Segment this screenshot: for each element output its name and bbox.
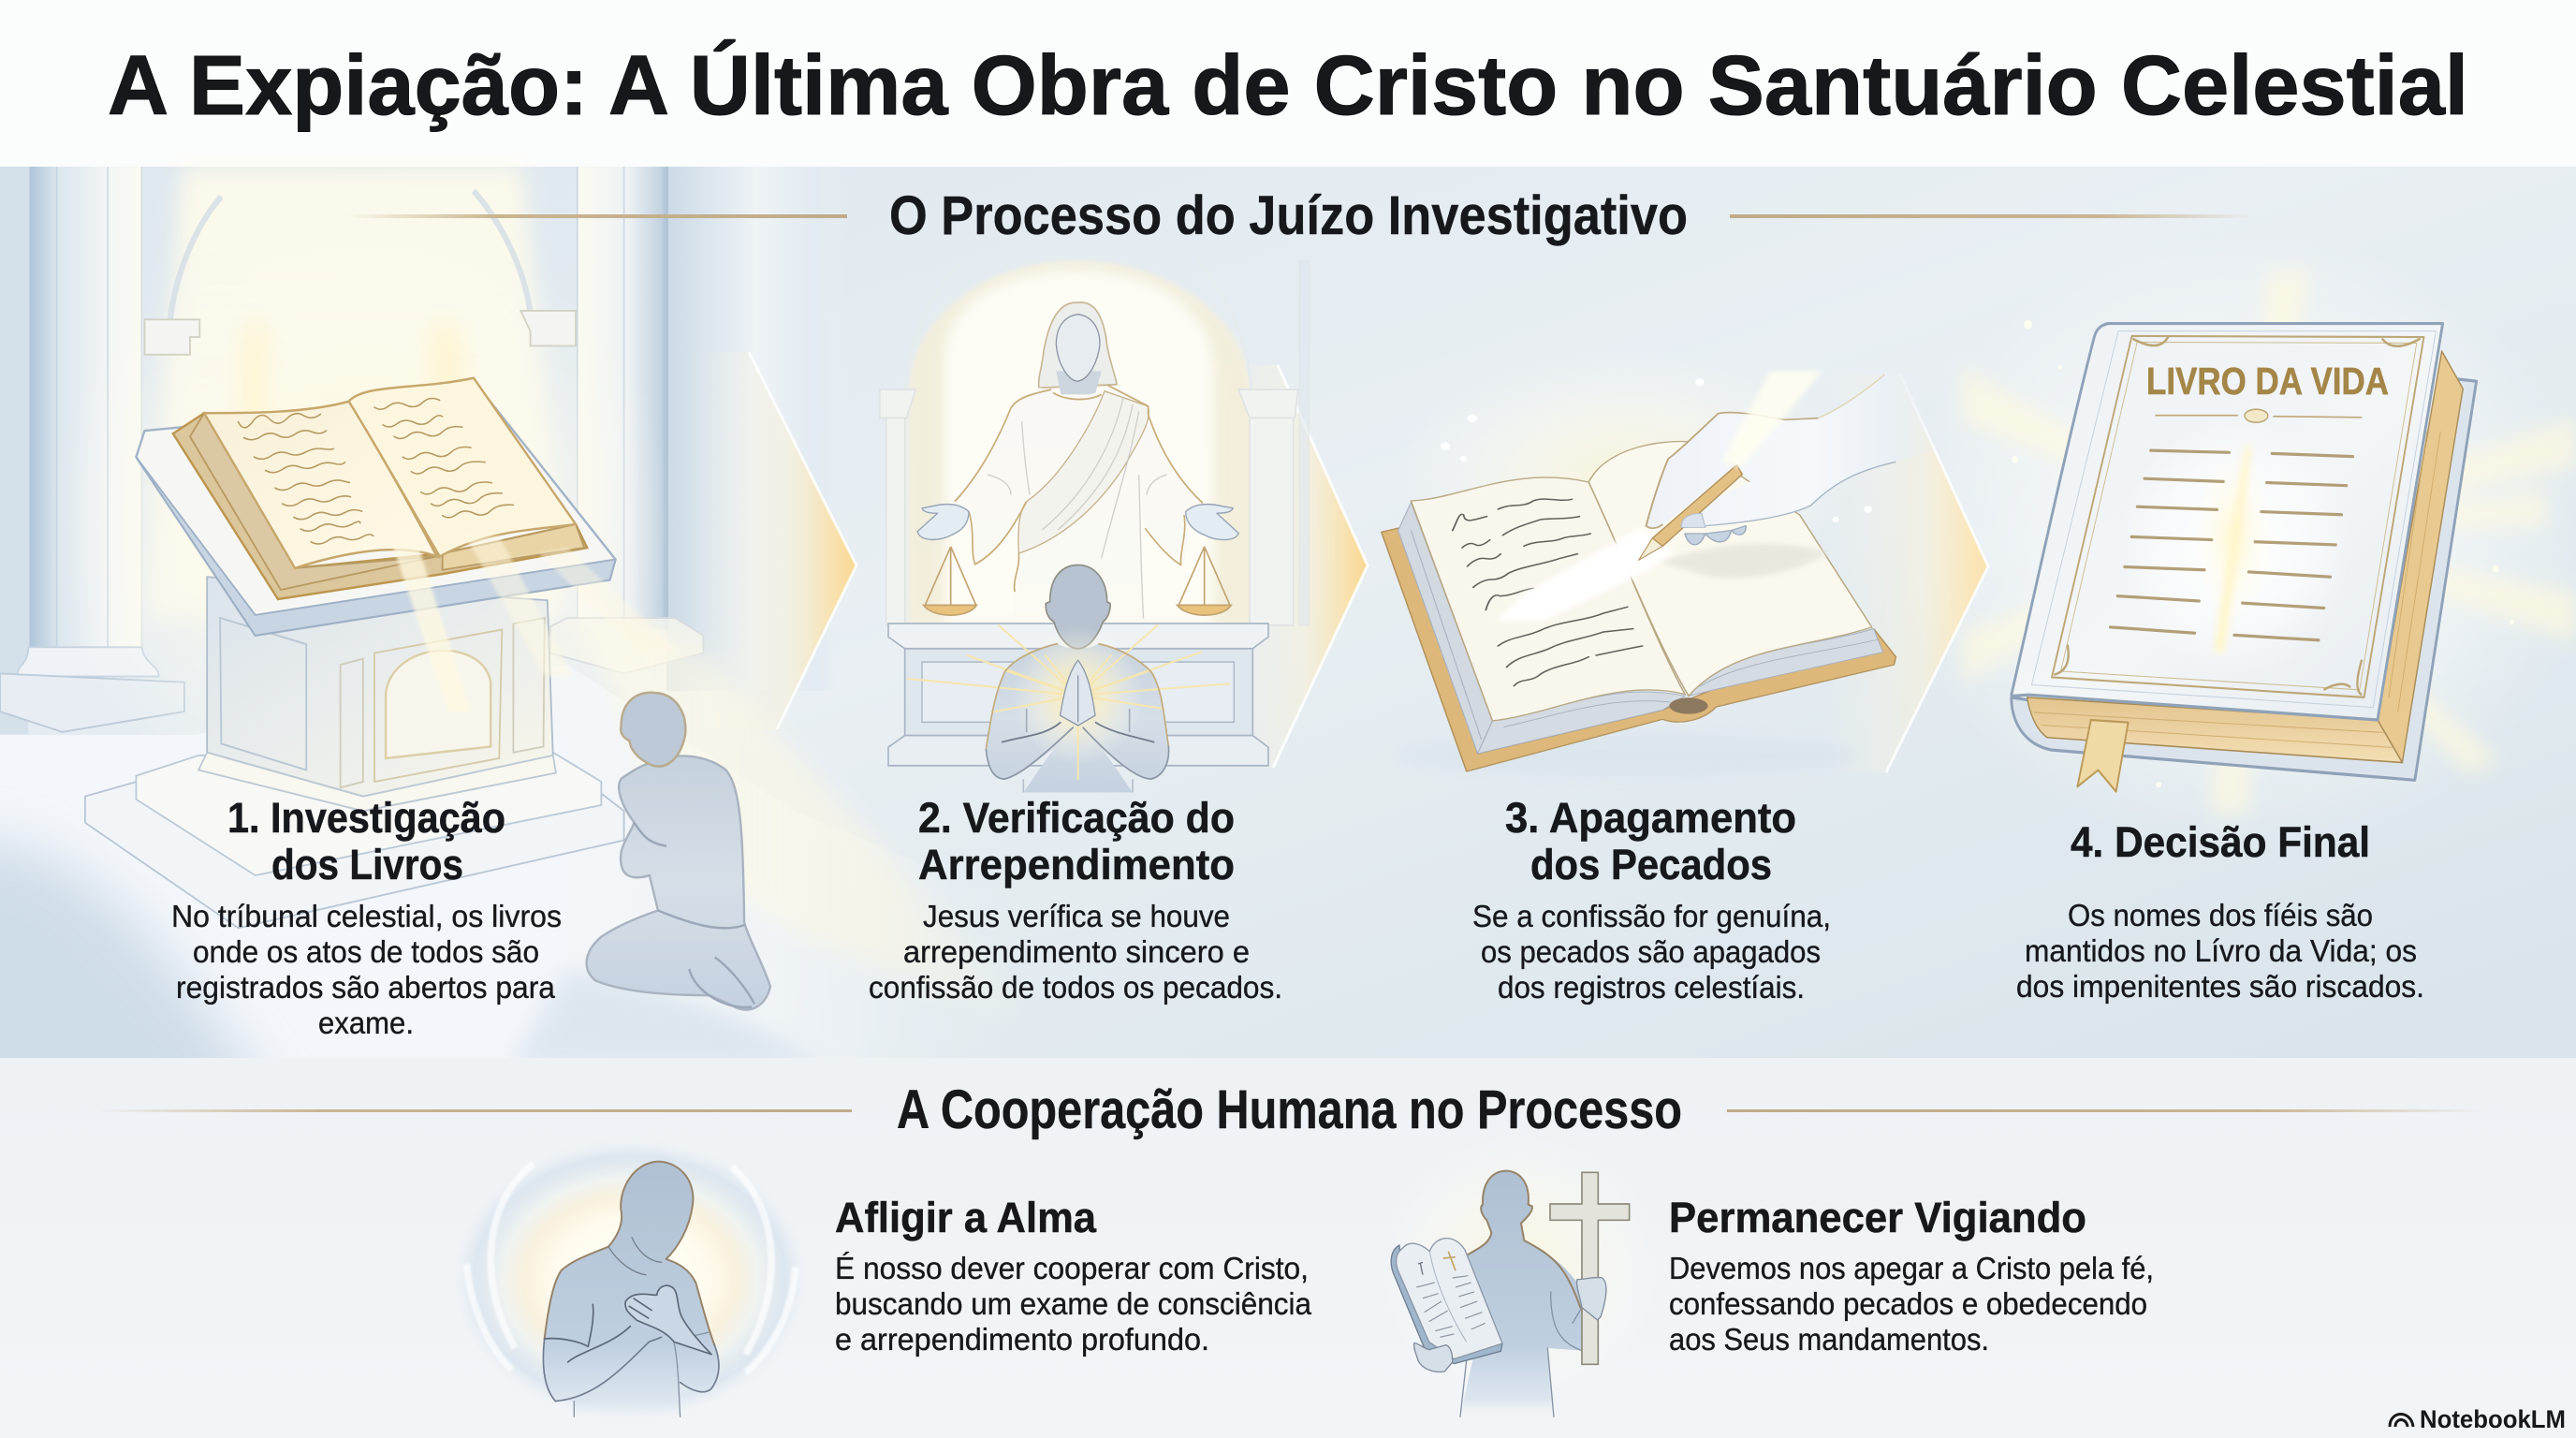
step 2 text [869, 794, 1282, 1005]
step 4 text: 4. Decisão Final [2071, 818, 2370, 866]
floor [0, 665, 1021, 1067]
arch [170, 191, 531, 319]
heading: o processo do juízo investigativo [346, 185, 2254, 246]
page blocks [1398, 503, 1492, 754]
step 1 text: exame. [318, 1005, 414, 1040]
step 2 text: confissão de todos os pecados. [869, 970, 1282, 1005]
panel: o processo do juízo investigativo [0, 167, 2576, 1133]
bookmark ribbon [2077, 720, 2129, 792]
step 2 text: Jesus verífica se houve [923, 899, 1230, 933]
hand on cross [1577, 1278, 1606, 1320]
Jesus figure [917, 302, 1238, 622]
praying man [908, 565, 1229, 792]
notebooklm logo: NotebookLM [2420, 1405, 2566, 1433]
hand on heart [625, 1285, 711, 1355]
name lines [2110, 450, 2353, 640]
sub-heading and text: permanecer vigiando: Devemos nos apegar a Cristo pela fé, [1669, 1251, 2154, 1285]
right column base [550, 618, 703, 673]
light from above [148, 167, 567, 618]
step 3 text [1472, 794, 1831, 1005]
step 3 text: dos registros celestíais. [1498, 970, 1805, 1005]
step 4 illustration: book of life [1895, 230, 2576, 853]
title: A Expiação: A Última Obra de Cristo no Santuário Celestial [108, 38, 2468, 133]
sub-heading and text: afligir a alma: Afligir a Alma [835, 1194, 1097, 1241]
book title: livro da vida: LIVRO DA VIDA [2146, 360, 2389, 403]
spine [1669, 697, 1708, 714]
background column bands [666, 167, 844, 691]
step 1 illustration: open book on lectern with kneeling man [0, 167, 1032, 1133]
central light [2119, 417, 2353, 677]
hand [1639, 372, 1947, 560]
face [1056, 315, 1100, 381]
panel: a cooperação humana [0, 1058, 2576, 1438]
step 3 text: Se a confissão for genuína, [1472, 899, 1831, 933]
step 1 text [171, 794, 562, 1040]
arrow edges [749, 352, 1988, 772]
erasing light [1496, 527, 1674, 621]
step 4 text [2016, 818, 2424, 1004]
altar [888, 624, 1268, 766]
page edges [2378, 351, 2463, 763]
step 4 text: dos impenitentes são riscados. [2016, 969, 2424, 1004]
step 2 text: 2. Verificação do [918, 794, 1235, 842]
step 2 text: Arrependimento [918, 841, 1235, 888]
light beams from book [391, 536, 681, 712]
step 2 text: arrependimento sincero e [903, 934, 1250, 969]
arrow 1 [683, 352, 856, 729]
kneeling man [587, 693, 770, 1010]
right page [1588, 442, 1872, 696]
open book [173, 378, 587, 599]
sub-heading and text: permanecer vigiando: aos Seus mandamentos. [1669, 1322, 1989, 1357]
left page [1411, 477, 1685, 721]
step 1 text: onde os atos de todos são [193, 934, 539, 969]
heading: a cooperação humana no processo [94, 1079, 2485, 1140]
arrow 2 [1208, 365, 1368, 768]
robe [955, 385, 1203, 622]
sparkles [2012, 320, 2514, 787]
gold frame [2052, 336, 2423, 697]
sub-heading and text: afligir a alma: É nosso dever cooperar com Cristo, [835, 1251, 1309, 1285]
cross [1550, 1172, 1630, 1364]
book cover [1382, 527, 1895, 771]
arrow 3 [1825, 374, 1988, 772]
step 3 text: dos Pecados [1530, 841, 1772, 888]
step 1 text: registrados são abertos para [176, 970, 556, 1005]
floor light beam [573, 607, 1032, 1028]
right column [578, 167, 668, 629]
step 1 text: No tríbunal celestial, os livros [171, 899, 562, 933]
back cover [2012, 379, 2477, 780]
sub-heading and text: afligir a alma: e arrependimento profundo. [835, 1322, 1209, 1357]
step 2 illustration: Jesus, scales, altar and praying man [880, 261, 1309, 792]
sparkles [1441, 378, 1872, 522]
icon: figure with hands on heart [452, 1139, 808, 1420]
step 4 text: mantidos no Lívro da Vida; os [2025, 933, 2417, 968]
balance scales [924, 547, 1231, 615]
sub-heading and text: afligir a alma: buscando um exame de consciência [835, 1286, 1312, 1321]
sub-heading and text: afligir a alma [835, 1194, 1312, 1357]
sub-heading and text: permanecer vigiando: Permanecer Vigiando [1669, 1194, 2086, 1241]
handwriting [1453, 499, 1643, 686]
arch glow [908, 261, 1251, 625]
step 3 illustration: hand erasing in open book [1382, 353, 1947, 777]
step 1 text: dos Livros [271, 841, 463, 888]
pillars [880, 261, 1309, 625]
sub-heading and text: permanecer vigiando: confessando pecados e obedecendo [1669, 1286, 2147, 1321]
light streak over hand [1722, 372, 1822, 468]
praying hands [1061, 660, 1095, 726]
heading: a cooperação humana no processo: A Cooperação Humana no Processo [897, 1079, 1682, 1140]
step 3 text: 3. Apagamento [1505, 794, 1796, 842]
step 3 text: os pecados são apagados [1481, 934, 1821, 969]
front cover [2012, 324, 2443, 720]
heading: o processo do juízo investigativo: O Processo do Juízo Investigativo [889, 185, 1688, 246]
hands [917, 505, 969, 539]
ornament [2155, 416, 2362, 418]
left column [0, 167, 184, 734]
lectern slab [136, 399, 616, 636]
step 4 text: Os nomes dos fíéis são [2068, 898, 2373, 932]
step 1 text: 1. Investigação [227, 794, 505, 842]
icon: figure holding tablets and cross [1376, 1130, 1663, 1416]
stone tablets [1391, 1239, 1502, 1364]
lectern pedestal [198, 577, 556, 811]
sub-heading and text: permanecer vigiando [1669, 1194, 2154, 1357]
hand under tablets [1414, 1343, 1453, 1372]
steps [85, 753, 624, 928]
cast shadow [1659, 544, 1829, 578]
